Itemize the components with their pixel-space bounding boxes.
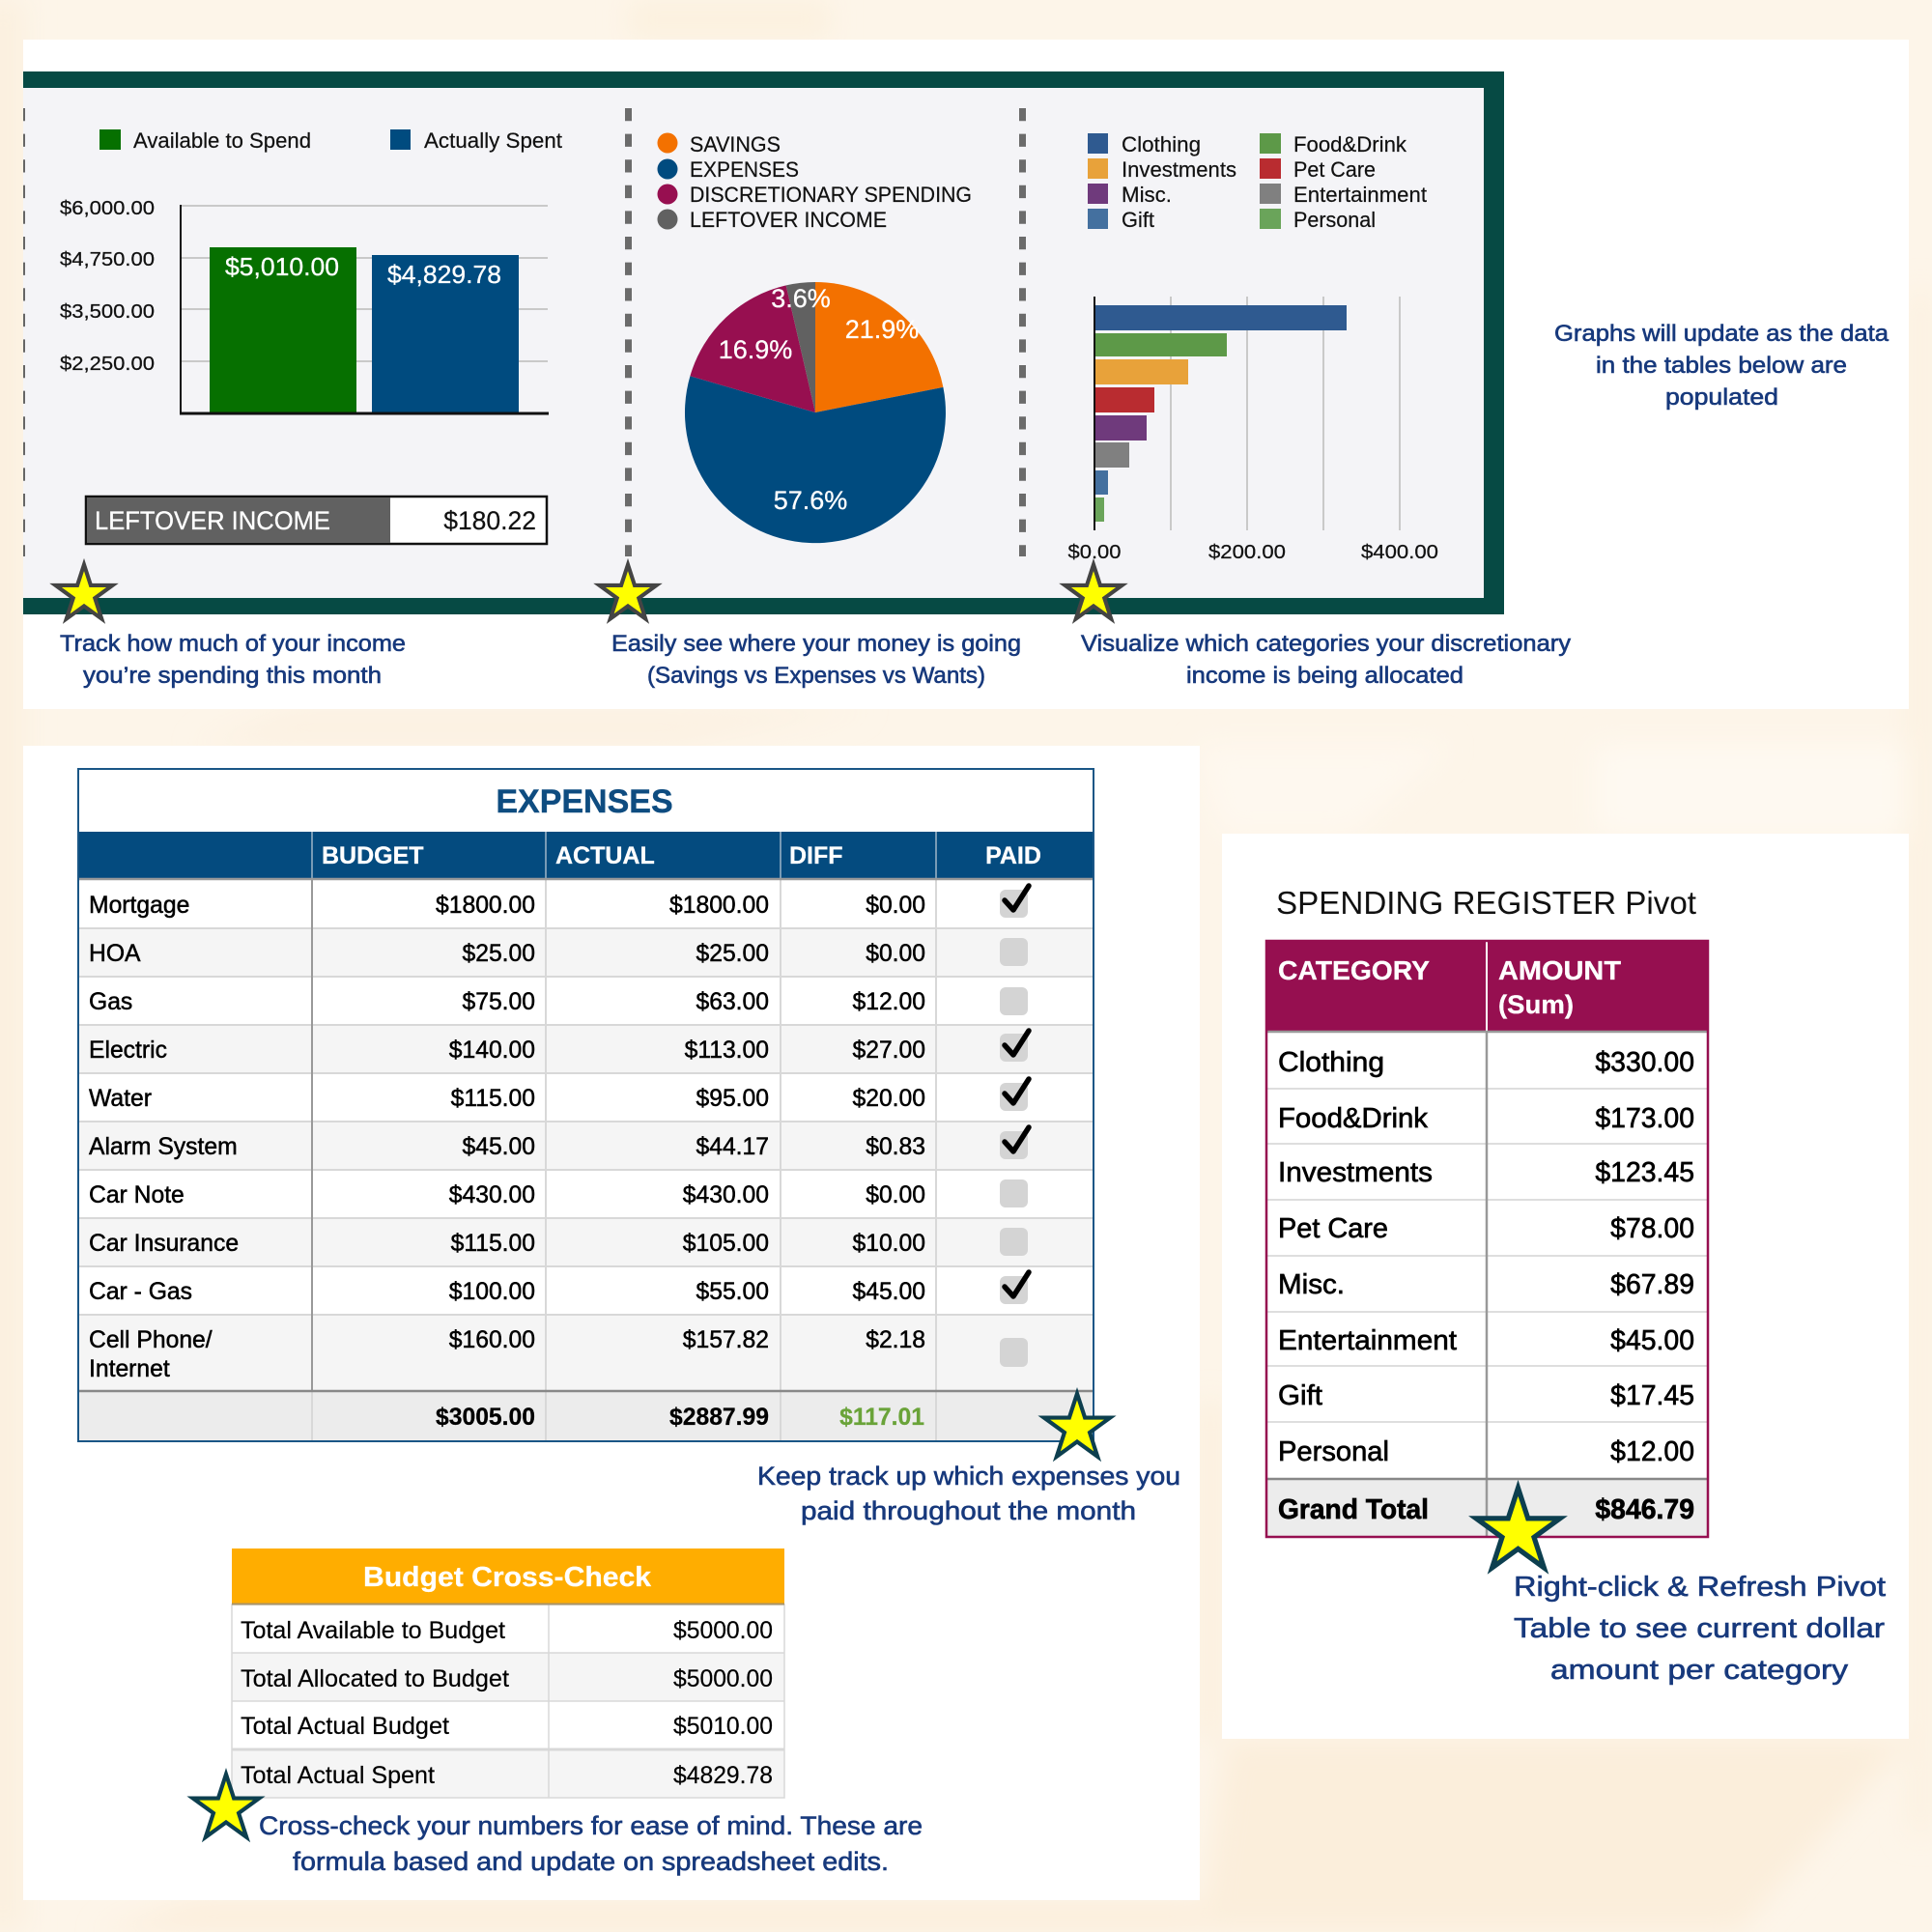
pivot categories: Entertainment [1278, 1325, 1457, 1356]
bar chart: available vs spent: $2,250.00 [60, 353, 155, 375]
icon: star cross-check [193, 1775, 259, 1837]
legend: discretionary categories: Pet Care [1293, 157, 1376, 182]
caption: cross-check [259, 1811, 923, 1876]
icon: star 3 [1065, 564, 1122, 619]
table: budget cross-check [232, 1548, 784, 1798]
pivot headers: CATEGORY [1278, 955, 1430, 985]
cross-check rows [241, 1618, 773, 1789]
row labels: Alarm System [89, 1134, 238, 1160]
column headers: DIFF [789, 842, 843, 869]
pivot amounts: $45.00 [1610, 1325, 1694, 1356]
row labels: HOA [89, 941, 141, 967]
cross-check rows: $5000.00 [673, 1666, 773, 1692]
cross-check rows: Total Available to Budget [241, 1618, 505, 1644]
heading: expenses: EXPENSES [496, 783, 673, 820]
pivot categories: Grand Total [1278, 1494, 1429, 1525]
actual column: $157.82 [683, 1327, 769, 1353]
note: graphs update: populated [1665, 384, 1778, 411]
legend: discretionary categories: Gift [1122, 208, 1154, 232]
caption: expenses [757, 1462, 1180, 1525]
bar chart: available vs spent: $6,000.00 [60, 197, 155, 219]
budget column: $160.00 [449, 1327, 535, 1353]
budget column: $45.00 [462, 1134, 535, 1160]
diff column: $0.00 [866, 941, 925, 967]
column headers: PAID [985, 842, 1041, 869]
legend: money split [657, 132, 972, 232]
actual column: $430.00 [683, 1182, 769, 1208]
caption: money split [611, 631, 1021, 689]
cross-check rows: $4829.78 [673, 1763, 773, 1789]
legend: income chart [99, 128, 562, 153]
caption: cross-check: Cross-check your numbers for ease of mind. These are [259, 1811, 923, 1840]
caption: expenses: Keep track up which expenses you [757, 1462, 1180, 1491]
bar chart: available vs spent: $3,500.00 [60, 300, 155, 323]
pivot amounts: $12.00 [1610, 1436, 1694, 1467]
pivot headers [1278, 955, 1621, 1019]
pie chart: money split: 16.9% [719, 335, 792, 364]
pivot categories [1278, 1047, 1457, 1525]
legend: money split: SAVINGS [690, 132, 781, 156]
row labels: Cell Phone/ [89, 1327, 213, 1353]
leftover income box: LEFTOVER INCOME [95, 506, 330, 535]
icon: star 2 [600, 564, 656, 619]
heading: cross-check: Budget Cross-Check [363, 1562, 652, 1593]
pivot headers: AMOUNT [1498, 955, 1621, 985]
column headers: ACTUAL [555, 842, 655, 869]
cross-check rows: $5010.00 [673, 1714, 773, 1740]
row labels: Internet [89, 1356, 170, 1382]
actual column [669, 893, 769, 1431]
bar chart: available vs spent: $5,010.00 [225, 252, 339, 281]
caption: categories: Visualize which categories your discretionary [1081, 631, 1571, 657]
bar chart: available vs spent [60, 197, 549, 414]
diff column: $10.00 [852, 1231, 925, 1257]
pie chart: money split: 57.6% [774, 486, 847, 515]
cross-check rows: $5000.00 [673, 1618, 773, 1644]
pivot amounts: $330.00 [1595, 1047, 1694, 1078]
leftover income box: $180.22 [443, 506, 536, 535]
leftover income box [86, 497, 547, 544]
legend: discretionary categories: Entertainment [1293, 183, 1427, 207]
bar chart: available vs spent: $4,750.00 [60, 248, 155, 270]
pivot categories: Misc. [1278, 1269, 1345, 1300]
budget column: $1800.00 [436, 893, 535, 919]
budget column: $3005.00 [436, 1405, 535, 1431]
paid checkboxes [1000, 886, 1029, 1367]
pie chart: money split [685, 282, 946, 543]
column headers: BUDGET [322, 842, 424, 869]
budget column: $115.00 [451, 1231, 535, 1257]
diff column: $117.01 [839, 1405, 924, 1431]
actual column: $105.00 [683, 1231, 769, 1257]
column headers [322, 842, 1041, 869]
budget column [436, 893, 535, 1431]
pivot categories: Clothing [1278, 1047, 1384, 1078]
pivot amounts: $78.00 [1610, 1213, 1694, 1244]
caption: income: you’re spending this month [83, 663, 382, 689]
table: expenses [78, 769, 1094, 1441]
actual column: $63.00 [696, 989, 769, 1015]
diff column: $0.00 [866, 893, 925, 919]
pivot amounts: $173.00 [1595, 1103, 1694, 1134]
caption: pivot [1514, 1572, 1886, 1686]
legend: discretionary categories: Investments [1122, 157, 1236, 182]
pivot headers: (Sum) [1498, 990, 1574, 1019]
row labels: Electric [89, 1037, 167, 1064]
panel: expenses and cross-check [23, 746, 1200, 1900]
row labels [89, 893, 239, 1382]
legend: money split: DISCRETIONARY SPENDING [690, 183, 972, 207]
legend: discretionary categories: Personal [1293, 208, 1376, 232]
actual column: $1800.00 [669, 893, 769, 919]
heading: spending register: SPENDING REGISTER Pivot [1276, 885, 1696, 921]
bar chart: discretionary categories: $200.00 [1208, 541, 1286, 563]
pivot amounts: $67.89 [1610, 1269, 1694, 1300]
actual column: $113.00 [685, 1037, 769, 1064]
diff column: $0.00 [866, 1182, 925, 1208]
budget column: $430.00 [449, 1182, 535, 1208]
legend: income chart: Actually Spent [424, 128, 562, 153]
pivot categories: Pet Care [1278, 1213, 1388, 1244]
actual column: $55.00 [696, 1279, 769, 1305]
legend: discretionary categories: Clothing [1122, 132, 1201, 156]
caption: expenses: paid throughout the month [801, 1496, 1136, 1525]
note: graphs update: in the tables below are [1596, 353, 1847, 379]
row labels: Mortgage [89, 893, 189, 919]
diff column: $2.18 [866, 1327, 925, 1353]
caption: cross-check: formula based and update on spreadsheet edits. [293, 1847, 889, 1876]
row labels: Car - Gas [89, 1279, 192, 1305]
cross-check rows: Total Allocated to Budget [241, 1666, 509, 1692]
actual column: $95.00 [696, 1086, 769, 1112]
legend: discretionary categories [1088, 132, 1427, 232]
row labels: Water [89, 1086, 152, 1112]
caption: categories [1081, 631, 1571, 689]
row labels: Gas [89, 989, 132, 1015]
actual column: $44.17 [696, 1134, 769, 1160]
caption: pivot: Table to see current dollar [1514, 1613, 1885, 1644]
actual column: $25.00 [696, 941, 769, 967]
cross-check rows: Total Actual Budget [241, 1714, 449, 1740]
caption: pivot: amount per category [1550, 1655, 1849, 1686]
caption: pivot: Right-click & Refresh Pivot [1514, 1572, 1886, 1603]
pivot amounts [1595, 1047, 1694, 1525]
pivot amounts: $123.45 [1595, 1157, 1694, 1188]
pivot categories: Food&Drink [1278, 1103, 1429, 1134]
legend: discretionary categories: Food&Drink [1293, 132, 1407, 156]
panel: dashboard charts [23, 40, 1909, 709]
pie chart: money split: 21.9% [845, 315, 919, 344]
bar chart: discretionary categories: $400.00 [1361, 541, 1438, 563]
row labels: Car Insurance [89, 1231, 239, 1257]
caption: money split: (Savings vs Expenses vs Wants) [647, 663, 985, 689]
diff column: $12.00 [852, 989, 925, 1015]
bar chart: available vs spent: $4,829.78 [387, 260, 501, 289]
pivot categories: Personal [1278, 1436, 1389, 1467]
legend: money split: LEFTOVER INCOME [690, 208, 887, 232]
icon: star pivot [1476, 1488, 1560, 1568]
icon: star expenses [1044, 1394, 1110, 1457]
note: graphs update: Graphs will update as the data [1554, 321, 1889, 347]
icon: star 1 [56, 564, 112, 619]
panel: spending register pivot [1222, 834, 1909, 1739]
pivot amounts: $17.45 [1610, 1380, 1694, 1411]
legend: money split: EXPENSES [690, 157, 799, 182]
bar chart: discretionary categories: $0.00 [1068, 541, 1121, 563]
caption: income: Track how much of your income [60, 631, 406, 657]
note: graphs update [1554, 321, 1889, 411]
diff column: $27.00 [852, 1037, 925, 1064]
diff column: $0.83 [866, 1134, 925, 1160]
caption: categories: income is being allocated [1186, 663, 1463, 689]
diff column [839, 893, 925, 1431]
diff column: $20.00 [852, 1086, 925, 1112]
caption: income [60, 631, 406, 689]
caption: money split: Easily see where your money is going [611, 631, 1021, 657]
bar chart: discretionary categories [1068, 297, 1438, 563]
pivot categories: Gift [1278, 1380, 1322, 1411]
budget column: $100.00 [449, 1279, 535, 1305]
diff column: $45.00 [852, 1279, 925, 1305]
budget column: $75.00 [462, 989, 535, 1015]
actual column: $2887.99 [669, 1405, 769, 1431]
legend: discretionary categories: Misc. [1122, 183, 1172, 207]
pie chart: money split: 3.6% [771, 284, 831, 313]
budget column: $140.00 [449, 1037, 535, 1064]
legend: income chart: Available to Spend [133, 128, 311, 153]
budget column: $115.00 [451, 1086, 535, 1112]
table: pivot [1266, 941, 1708, 1537]
row labels: Car Note [89, 1182, 185, 1208]
cross-check rows: Total Actual Spent [241, 1763, 435, 1789]
pivot amounts: $846.79 [1595, 1494, 1694, 1525]
budget column: $25.00 [462, 941, 535, 967]
pivot categories: Investments [1278, 1157, 1433, 1188]
